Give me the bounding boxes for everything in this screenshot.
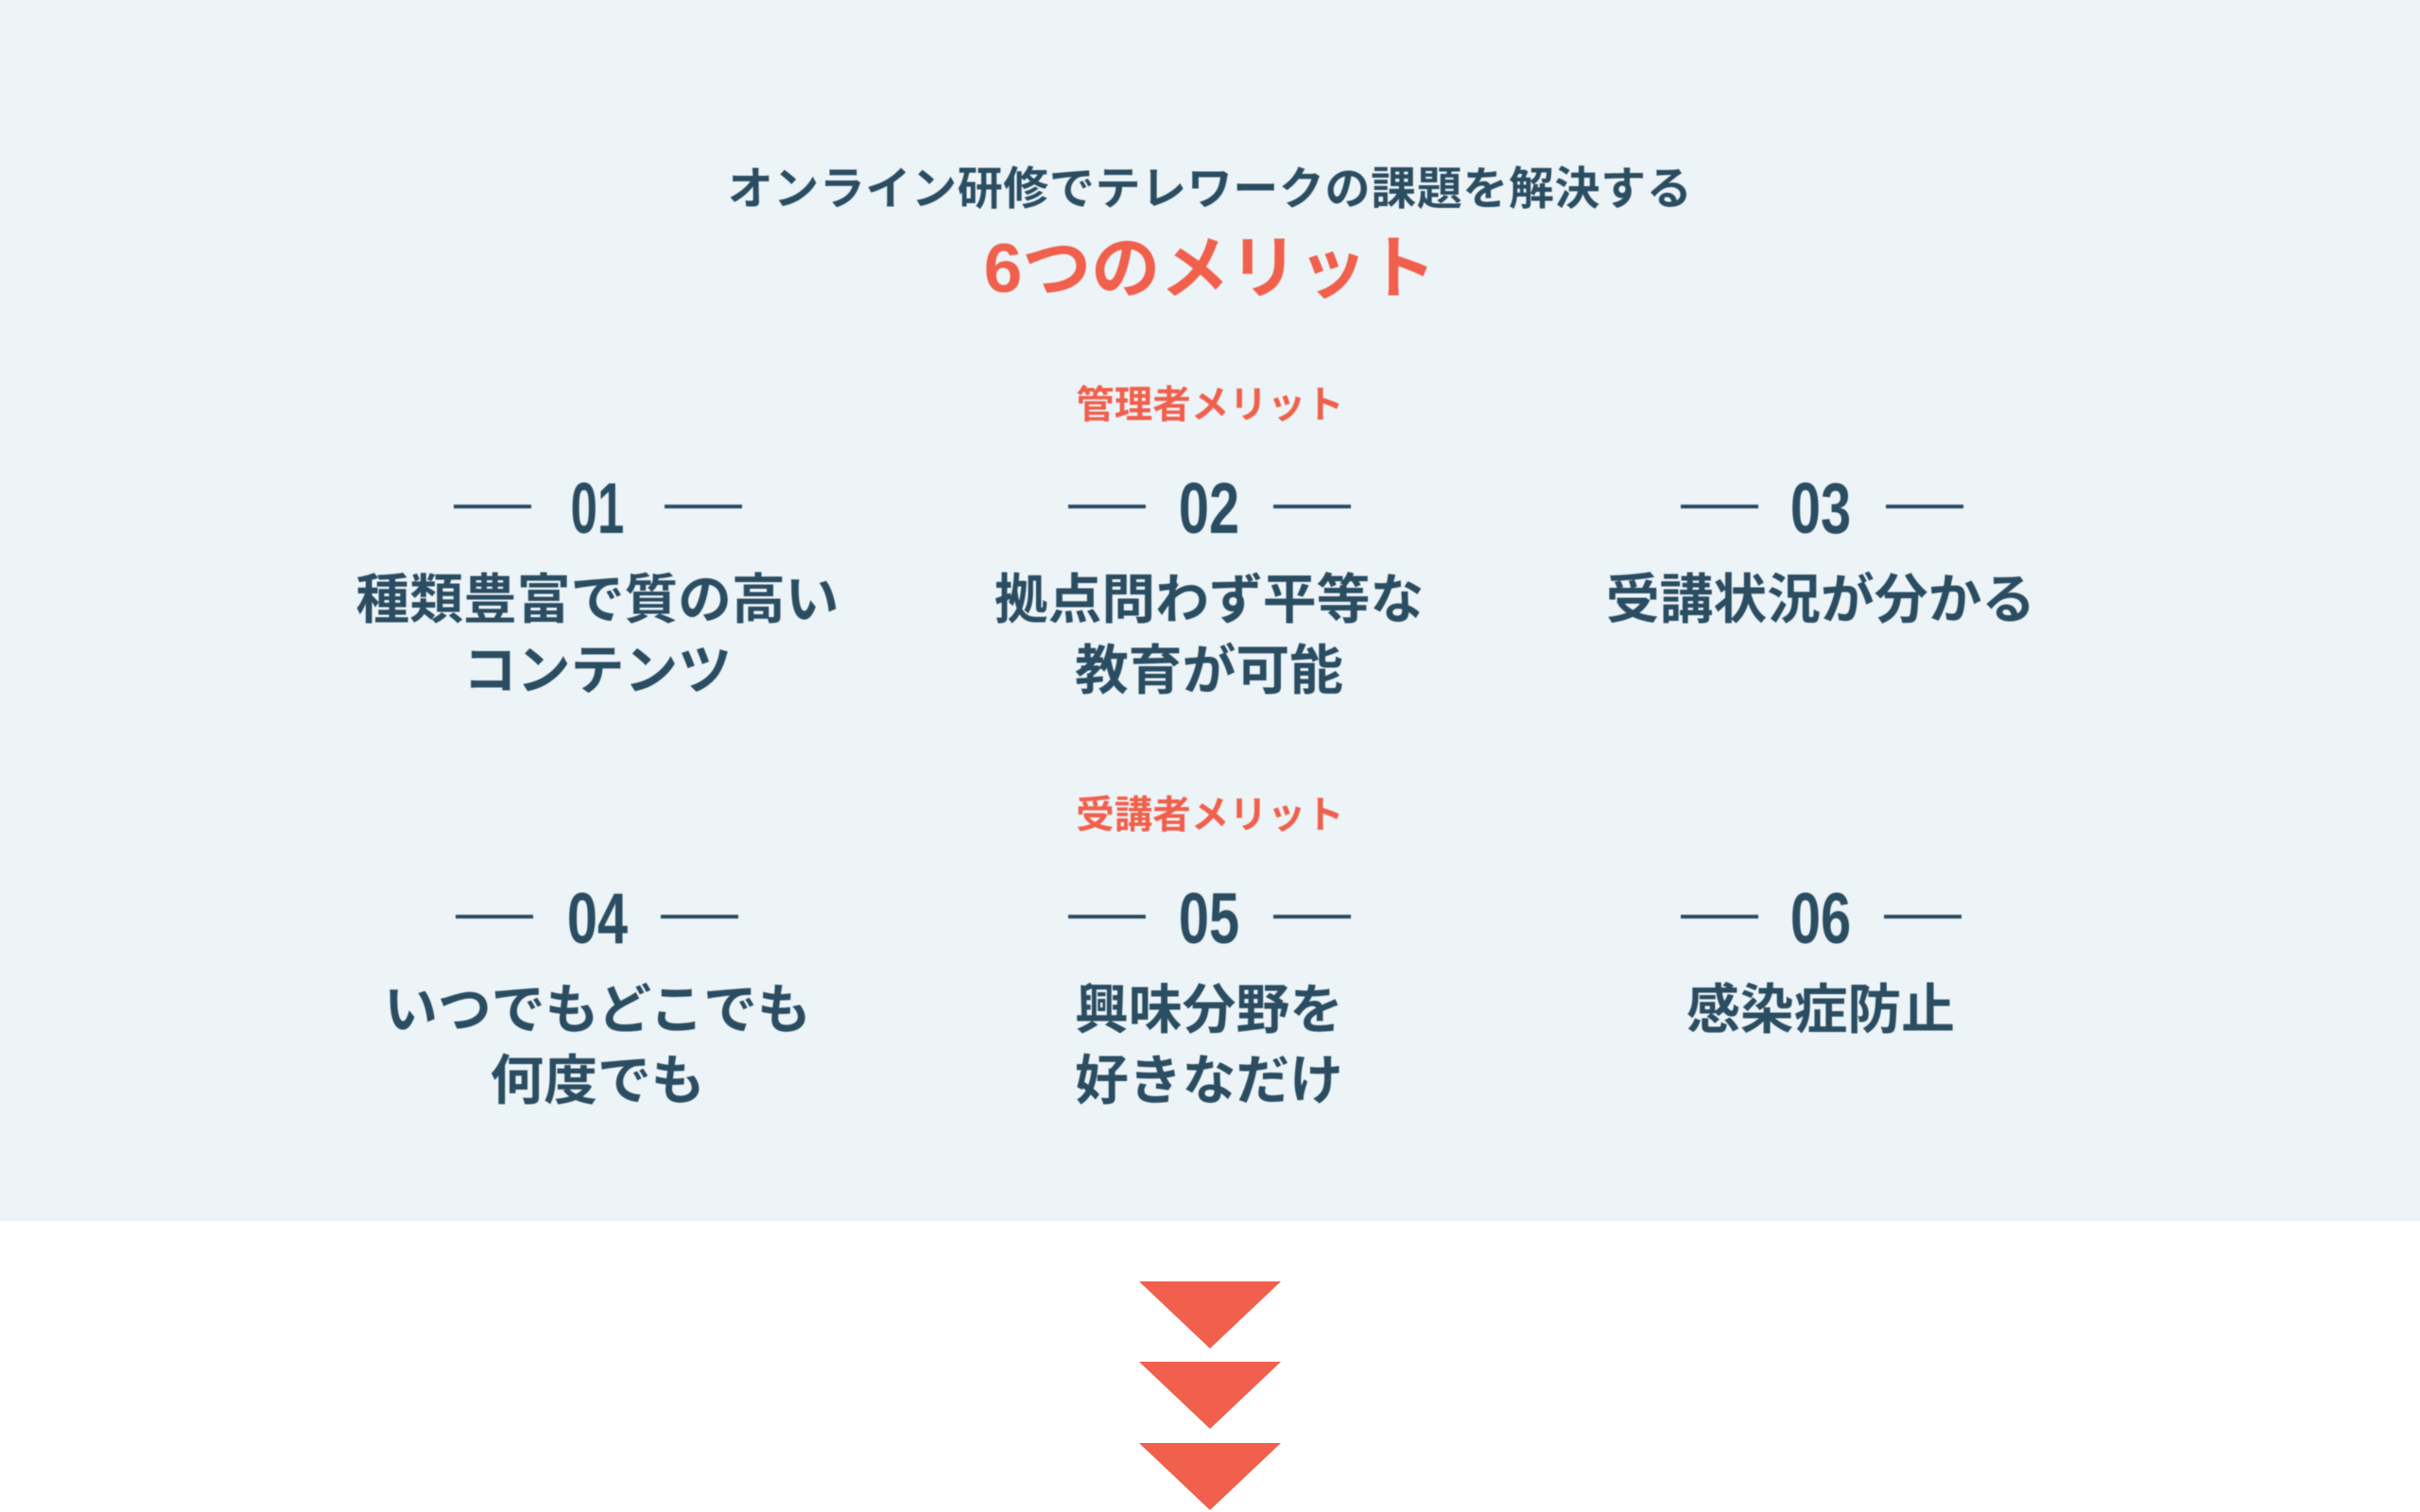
item 05: 05 bbox=[1179, 879, 1239, 959]
item 03: 受講状況が分かる bbox=[1606, 571, 2035, 629]
item 01: コンテンツ bbox=[463, 641, 732, 701]
title: オンライン研修でテレワークの課題を解決する bbox=[728, 164, 1692, 215]
item 01: 種類豊富で質の高い bbox=[355, 571, 839, 629]
section label: manager merits: 管理者メリット bbox=[1076, 383, 1344, 426]
item 04: いつでもどこでも bbox=[384, 981, 811, 1040]
item 06 bbox=[1680, 879, 1962, 1040]
item 04: 何度でも bbox=[490, 1051, 705, 1111]
item 05: 興味分野を bbox=[1075, 981, 1343, 1040]
section label: learner merits: 受講者メリット bbox=[1076, 793, 1344, 836]
item 06: 06 bbox=[1790, 879, 1851, 959]
heading: six merits: 6つのメリット bbox=[984, 231, 1436, 307]
item 03: 03 bbox=[1790, 469, 1851, 549]
item 04: 04 bbox=[567, 879, 628, 959]
item 01 bbox=[355, 469, 839, 701]
item 05: 好きなだけ bbox=[1075, 1051, 1343, 1111]
item 01: 01 bbox=[571, 469, 624, 549]
item 06: 感染症防止 bbox=[1686, 981, 1955, 1040]
item 04 bbox=[384, 879, 811, 1111]
item 05 bbox=[1067, 879, 1352, 1111]
item 03 bbox=[1606, 469, 2035, 629]
arrow: three downward triangles bbox=[1139, 1281, 1281, 1510]
item 02 bbox=[994, 469, 1424, 701]
item 02: 02 bbox=[1179, 469, 1239, 549]
item 02: 拠点問わず平等な bbox=[994, 571, 1424, 629]
item 02: 教育が可能 bbox=[1075, 641, 1343, 701]
